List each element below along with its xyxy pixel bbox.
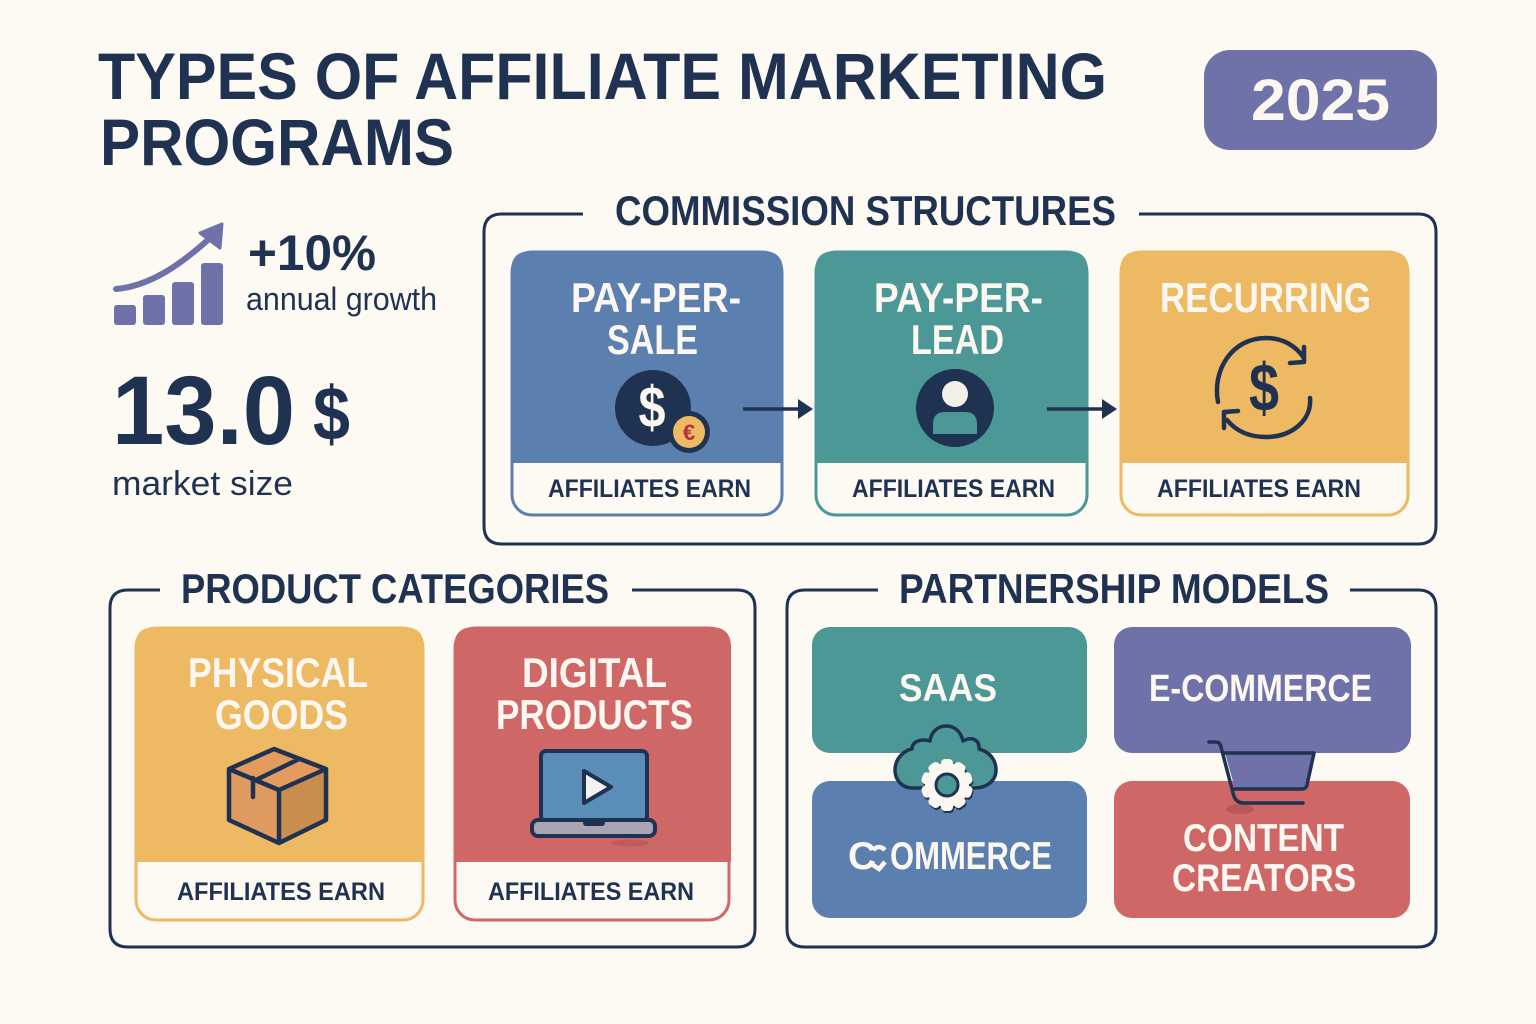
market size value: 13.0 <box>112 356 295 465</box>
heading: PARTNERSHIP MODELS <box>899 565 1329 612</box>
card: digital products: AFFILIATES EARN <box>488 878 694 906</box>
panel: product categories <box>110 565 755 947</box>
card: physical goods: PHYSICAL <box>188 649 368 696</box>
icon: recurring dollar <box>1217 338 1310 437</box>
card: content creators <box>1114 781 1410 918</box>
heading: PRODUCT CATEGORIES <box>181 565 609 612</box>
market size stat <box>112 356 350 503</box>
growth value: +10% <box>248 225 376 281</box>
icon: growth chart <box>114 224 223 325</box>
arrow: lead to recurring <box>1047 399 1117 419</box>
icon: laptop with play button <box>532 751 655 846</box>
growth label: annual growth <box>246 281 437 317</box>
card: commerce <box>812 781 1087 918</box>
card: digital products <box>454 627 731 920</box>
heading: COMMISSION STRUCTURES <box>615 187 1116 234</box>
card: saas <box>812 627 1087 753</box>
icon: recurring dollar: $ <box>1249 350 1279 426</box>
icon: dollar and euro coins: $ <box>638 375 666 440</box>
title <box>98 39 1107 179</box>
panel: commission structures <box>484 187 1436 544</box>
card: e-commerce: E-COMMERCE <box>1149 668 1372 710</box>
card: content creators: CONTENT <box>1183 817 1344 860</box>
card: content creators: CREATORS <box>1172 857 1356 900</box>
title: TYPES OF AFFILIATE MARKETING <box>98 39 1107 113</box>
card: physical goods <box>135 627 424 920</box>
icon: dollar and euro coins: € <box>683 420 695 445</box>
card: pay-per-lead <box>815 251 1088 515</box>
market size label: market size <box>112 465 293 503</box>
title: PROGRAMS <box>100 105 454 179</box>
card: commerce: C <box>848 835 876 878</box>
card: physical goods: GOODS <box>215 691 348 738</box>
card: pay-per-sale: AFFILIATES EARN <box>548 475 751 503</box>
growth stat <box>114 224 437 325</box>
card: saas: SAAS <box>899 667 997 710</box>
card: digital products: DIGITAL <box>522 649 667 696</box>
icon: cloud with gear <box>895 726 996 813</box>
arrow: sale to lead <box>743 399 813 419</box>
card: pay-per-lead: LEAD <box>911 316 1004 363</box>
card: pay-per-sale: PAY-PER- <box>571 274 741 321</box>
card: pay-per-lead: AFFILIATES EARN <box>852 475 1055 503</box>
card: commerce: OMMERCE <box>890 835 1052 878</box>
year badge <box>1204 50 1437 150</box>
card: recurring: RECURRING <box>1160 274 1371 321</box>
icon: box <box>229 749 326 843</box>
panel: partnership models <box>787 565 1436 947</box>
card: e-commerce <box>1114 627 1411 753</box>
dollar sign: $ <box>313 372 350 457</box>
card: digital products: PRODUCTS <box>496 691 693 738</box>
card: physical goods: AFFILIATES EARN <box>177 878 385 906</box>
card: pay-per-sale <box>511 251 783 515</box>
card: recurring: AFFILIATES EARN <box>1157 475 1361 503</box>
card: pay-per-lead: PAY-PER- <box>874 274 1043 321</box>
card: pay-per-sale: SALE <box>607 316 698 363</box>
icon: shopping cart <box>1209 742 1314 814</box>
card: recurring <box>1120 251 1409 515</box>
year badge: 2025 <box>1251 68 1390 133</box>
icon: person <box>916 369 994 447</box>
icon: dollar and euro coins <box>615 370 710 453</box>
